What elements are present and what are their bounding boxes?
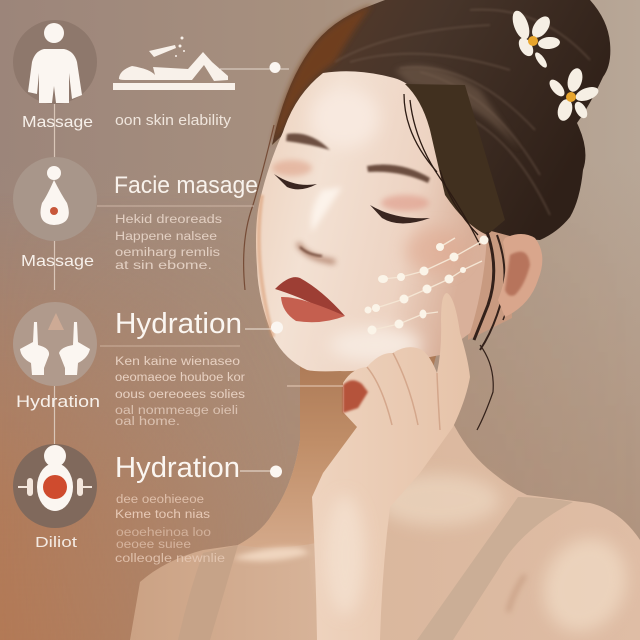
description: oeoeheinoa loo — [116, 527, 211, 539]
shoulder highlight — [528, 525, 640, 640]
finger lines — [367, 353, 440, 430]
nostril — [300, 247, 322, 256]
leader line and dot — [220, 62, 289, 73]
label: diliot: Diliot — [35, 534, 78, 551]
right eye — [370, 205, 430, 224]
fringe strands — [404, 94, 480, 245]
cheek blush — [405, 228, 465, 272]
arm crease — [508, 575, 525, 612]
panel: hydration step 4 — [13, 444, 282, 565]
description: colleogle newnlie — [115, 553, 225, 565]
description: oeomaeoe houboe kor — [115, 372, 245, 384]
icon: target figure — [13, 444, 97, 528]
icon: drop — [13, 157, 97, 241]
leader line and dot — [245, 322, 283, 334]
left eyelid blush — [272, 160, 312, 176]
divider — [100, 345, 240, 347]
auburn hair edge — [272, 5, 372, 145]
description — [115, 214, 222, 272]
flower upper — [509, 9, 560, 69]
description: Hekid dreoreads — [115, 214, 222, 226]
flower lower — [547, 67, 600, 122]
panel: massage step 1 — [13, 20, 289, 131]
description: dee oeohieeoe — [116, 494, 204, 506]
left eye — [274, 174, 317, 189]
nose highlight — [311, 187, 342, 232]
face — [256, 71, 487, 371]
forehead light — [311, 88, 379, 148]
right eyebrow — [367, 164, 430, 183]
panel: hydration step 3 — [13, 302, 343, 428]
torso and shoulders — [130, 400, 640, 640]
chest light — [376, 474, 500, 526]
neck — [238, 340, 440, 548]
face left rim — [259, 195, 273, 337]
icon: lying figure — [113, 36, 235, 90]
left wisps — [244, 125, 274, 290]
nose shadow — [298, 243, 335, 262]
hair parting sheen — [395, 66, 520, 150]
divider — [97, 205, 254, 207]
neck marker line — [287, 385, 343, 387]
description: at sin ebome. — [115, 260, 212, 272]
heading: Hydration — [115, 452, 240, 484]
description: Happene nalsee — [115, 231, 217, 243]
portrait: woman with hair in a bun — [130, 0, 640, 640]
description: oous oereoees solies — [115, 389, 245, 401]
vertical connector line — [54, 104, 56, 445]
ear — [498, 234, 542, 317]
heading: Facie masage — [114, 172, 258, 199]
finger shadow — [343, 380, 368, 413]
description: oal nommeage oieli — [115, 405, 238, 417]
label: massage: Massage — [22, 114, 93, 131]
description: oal home. — [115, 416, 180, 428]
fringe — [405, 84, 505, 235]
description — [115, 494, 225, 565]
description — [115, 356, 245, 428]
description: oeoee suiee — [116, 539, 191, 551]
label: hydration: Hydration — [16, 392, 100, 411]
hair — [272, 0, 610, 240]
upper lip — [275, 277, 345, 316]
inner ear — [505, 252, 530, 296]
left eyebrow — [286, 133, 330, 150]
label: massage: Massage — [21, 253, 94, 270]
hair strands — [335, 10, 590, 215]
cheek highlight — [329, 327, 421, 363]
description: Ken kaine wienaseo — [115, 356, 240, 368]
left strap — [178, 545, 238, 640]
caption: oon skin elability — [115, 112, 232, 129]
lower lip — [281, 297, 345, 322]
right eyelid blush — [381, 195, 429, 211]
description: Keme toch nias — [115, 509, 210, 521]
collarbone highlight — [232, 547, 310, 561]
right strap — [417, 497, 573, 640]
panel: facial massage step 2 — [13, 157, 258, 272]
cheek dot lines — [364, 236, 488, 334]
icon: person — [13, 20, 97, 104]
forearm and hand — [312, 293, 470, 640]
temple skin — [468, 228, 512, 340]
wrist highlight — [325, 495, 365, 615]
icon: hands — [13, 302, 97, 386]
side hair tendrils — [474, 232, 512, 430]
description: oemiharg remlis — [115, 247, 220, 259]
leader line and dot — [240, 466, 282, 478]
heading: Hydration — [115, 308, 242, 340]
